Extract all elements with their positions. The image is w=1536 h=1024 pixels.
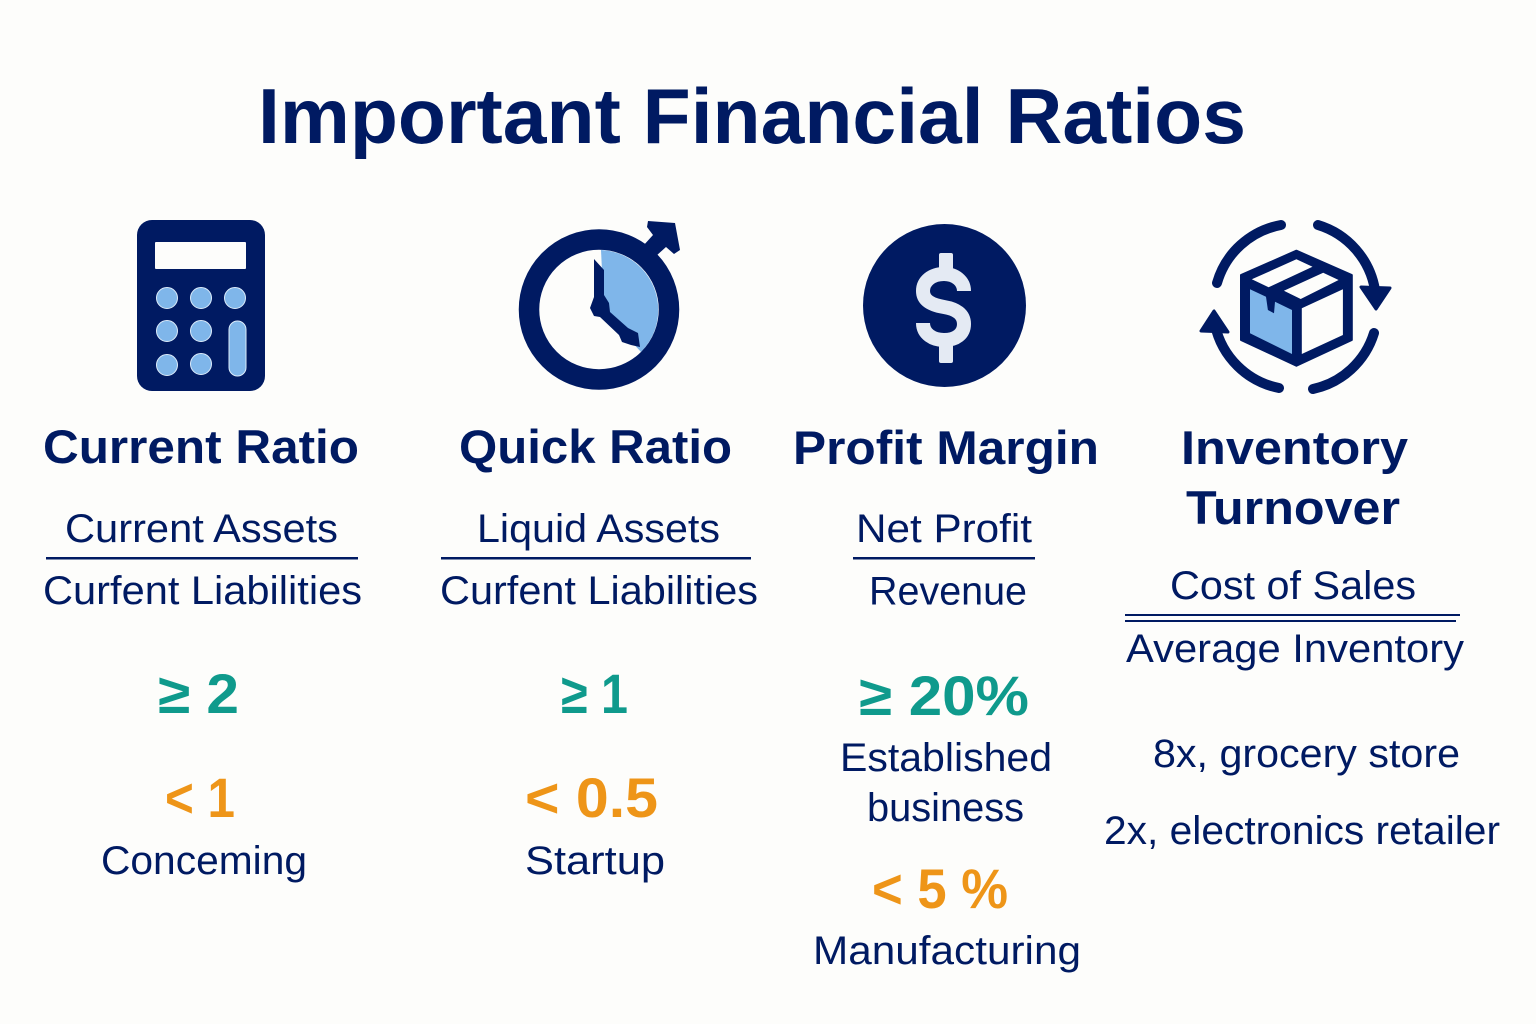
warning benchmark: quick ratio: < 0.5	[525, 766, 658, 829]
warning benchmark: current ratio: < 1	[165, 766, 235, 829]
heading: inventory turnover: Inventory	[1181, 421, 1408, 474]
icon: stopwatch	[529, 221, 680, 380]
heading: quick ratio: Quick Ratio	[459, 420, 732, 473]
formula: current ratio	[43, 507, 362, 613]
note: established business	[840, 736, 1052, 830]
icon: box with cycle arrows	[1201, 225, 1390, 389]
formula: current ratio: Curfent Liabilities	[43, 569, 362, 613]
formula: profit margin: Revenue	[869, 570, 1027, 614]
note: startup: Startup	[525, 839, 665, 883]
healthy benchmark: profit margin: ≥ 20%	[859, 664, 1029, 727]
icon: calculator	[137, 220, 265, 391]
note: established business: business	[867, 786, 1024, 830]
example: electronics retailer: 2x, electronics retailer	[1104, 809, 1500, 853]
note: manufacturing: Manufacturing	[813, 929, 1081, 973]
formula: inventory turnover	[1125, 564, 1464, 671]
warning benchmark: profit margin: < 5 %	[872, 857, 1008, 920]
formula: profit margin: Net Profit	[856, 507, 1032, 551]
formula: current ratio: Current Assets	[65, 507, 338, 551]
panel: current ratio	[43, 220, 362, 883]
panel: quick ratio	[440, 221, 758, 883]
panel: inventory turnover	[1104, 225, 1500, 853]
note: established business: Established	[840, 736, 1052, 780]
formula: quick ratio: Curfent Liabilities	[440, 569, 758, 613]
panel: profit margin	[793, 224, 1099, 973]
healthy benchmark: quick ratio: ≥ 1	[561, 662, 628, 725]
heading: current ratio: Current Ratio	[43, 420, 359, 473]
formula: profit margin	[853, 507, 1035, 614]
formula: quick ratio: Liquid Assets	[477, 507, 720, 551]
title: Important Financial Ratios	[258, 72, 1246, 160]
formula: quick ratio	[440, 507, 758, 613]
heading: inventory turnover: Turnover	[1186, 481, 1400, 534]
healthy benchmark: current ratio: ≥ 2	[158, 662, 239, 725]
example: grocery store: 8x, grocery store	[1153, 732, 1460, 776]
heading: inventory turnover	[1181, 421, 1408, 534]
formula: inventory turnover: Average Inventory	[1126, 627, 1464, 671]
heading: profit margin: Profit Margin	[793, 421, 1099, 474]
formula: inventory turnover: Cost of Sales	[1170, 564, 1416, 608]
note: concerning: Conceming	[101, 839, 307, 883]
icon: dollar coin	[863, 224, 1026, 387]
